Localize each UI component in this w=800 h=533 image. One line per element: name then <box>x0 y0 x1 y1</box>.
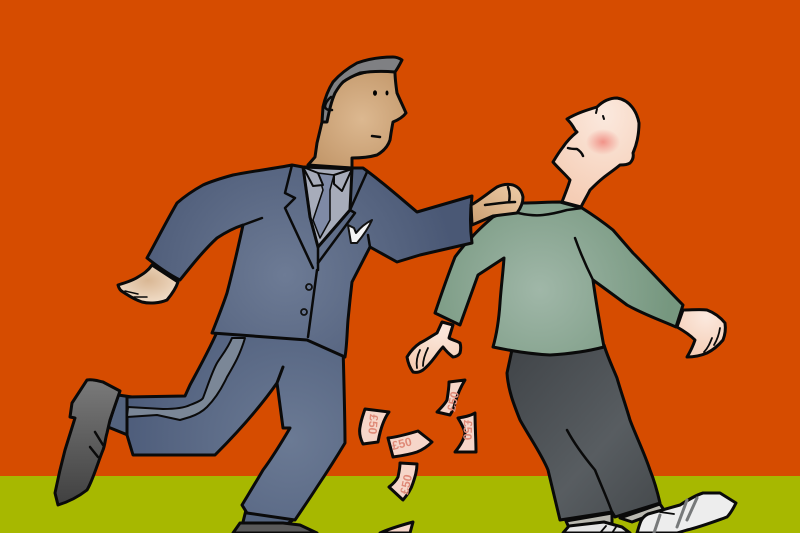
sweater <box>435 202 683 355</box>
banknote 5 <box>455 413 476 452</box>
shirt <box>303 167 352 247</box>
hair <box>322 57 402 122</box>
figure: man in suit <box>55 57 523 533</box>
left hand <box>407 322 461 372</box>
front ankle <box>242 510 296 526</box>
banknote 5: £50 <box>460 420 475 441</box>
banknote 1: £50 <box>365 414 381 435</box>
blush <box>586 129 620 155</box>
banknote 2: £50 <box>390 434 413 453</box>
sleeve fold <box>575 238 593 280</box>
banknote 4 <box>437 380 465 415</box>
trousers <box>507 345 660 520</box>
eyes <box>596 109 604 119</box>
banknote 1 <box>360 409 389 444</box>
banknote 3: £50 <box>397 473 415 496</box>
left hand <box>118 265 178 303</box>
background: green floor <box>0 476 800 533</box>
fist on collar <box>471 184 523 225</box>
trouser stripe <box>127 338 245 420</box>
collar <box>518 208 582 215</box>
ear <box>325 97 332 110</box>
mouth <box>372 136 380 137</box>
tie <box>313 173 334 238</box>
lapels <box>285 165 313 268</box>
banknote 6: bottom edge <box>380 522 413 533</box>
right hand <box>677 310 725 357</box>
trousers <box>127 325 345 520</box>
jacket <box>147 165 472 357</box>
icon: white tick pocket square <box>348 220 372 243</box>
arm folds <box>243 218 370 247</box>
socks <box>566 504 664 530</box>
back shoe <box>55 380 120 505</box>
left shoe <box>563 522 630 533</box>
right shoe <box>600 493 736 533</box>
ankle <box>108 395 132 436</box>
banknote 4: £50 <box>444 390 462 413</box>
banknote 3 <box>389 463 417 500</box>
banknote 2 <box>388 431 432 457</box>
collar points <box>303 167 352 191</box>
buttons <box>306 284 312 290</box>
neck and head <box>308 57 406 168</box>
figure: bald man <box>407 98 736 533</box>
neck and head <box>553 98 639 207</box>
front shoe <box>233 523 317 533</box>
mouth <box>568 148 583 156</box>
eyes <box>373 90 377 96</box>
